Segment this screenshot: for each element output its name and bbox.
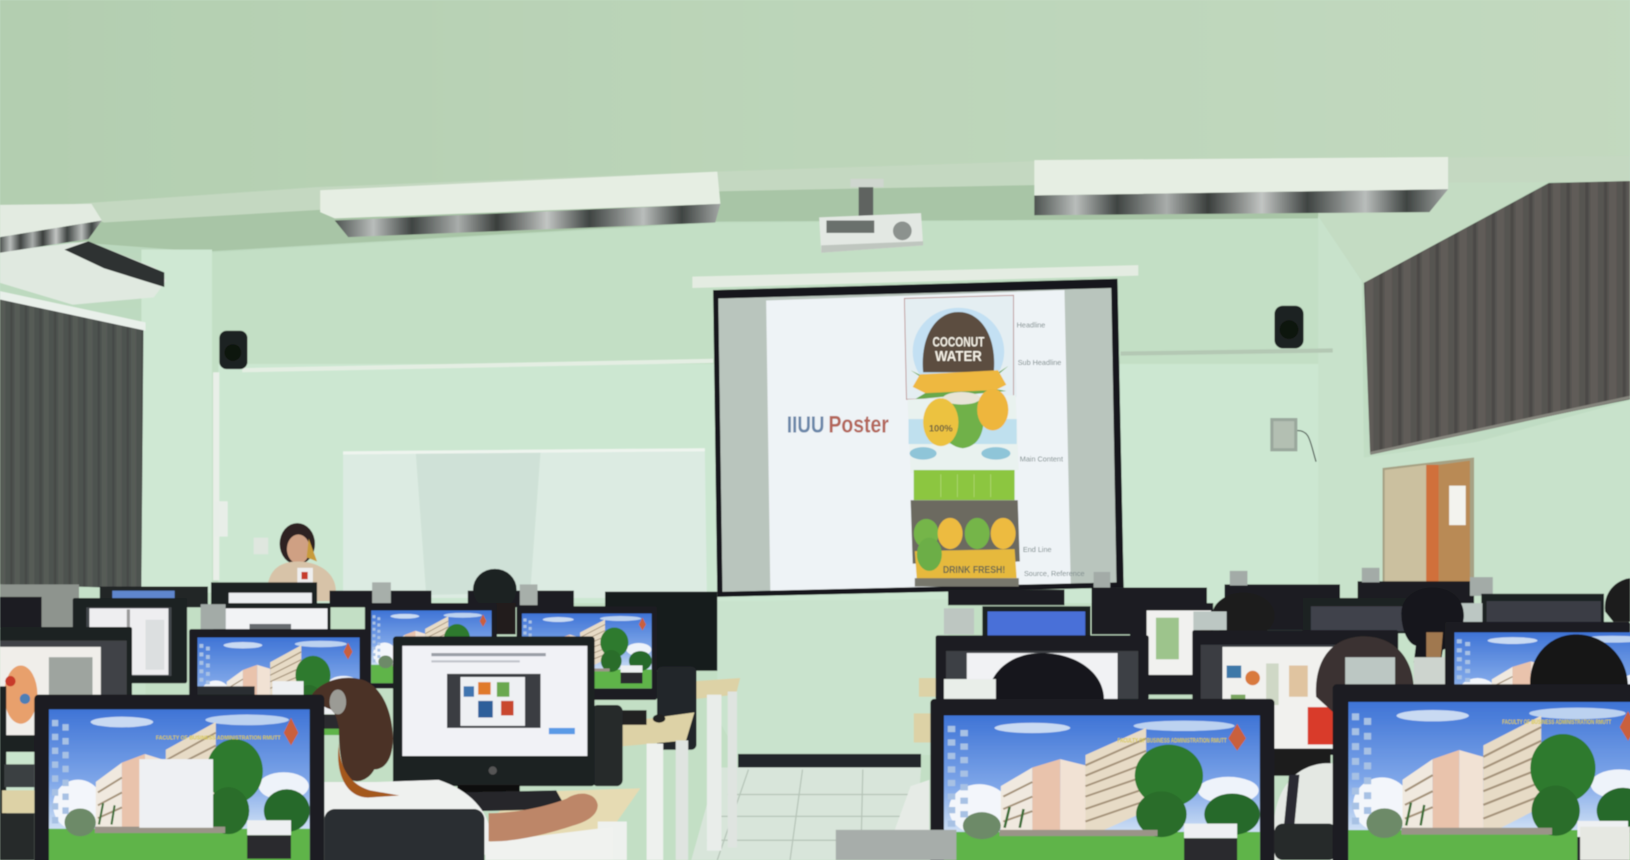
poster ribbon <box>913 370 1006 393</box>
left desk <box>2 790 34 813</box>
student with long hair <box>1273 636 1414 860</box>
slide title <box>787 412 889 439</box>
poster labels: Sub Headline <box>1018 358 1061 367</box>
wall picture rail left <box>242 359 713 372</box>
speaker: left <box>219 331 247 369</box>
monitor: front centre wallpaper <box>930 699 1274 860</box>
arm <box>489 794 598 841</box>
student head <box>988 653 1104 700</box>
light fixture: right <box>1034 157 1448 215</box>
wall box and cable <box>1270 418 1316 462</box>
monitor: row 3 wallpaper <box>189 629 368 735</box>
wall socket <box>214 501 228 537</box>
slide <box>766 290 1085 591</box>
hair clip <box>330 689 346 714</box>
monitor: dark screen <box>1303 598 1406 633</box>
whiteboard <box>343 448 707 598</box>
floor <box>691 767 921 860</box>
wallpaper caption: FACULTY OF BUSINESS ADMINISTRATION RMUTT <box>1118 737 1227 744</box>
wall pillar right <box>1318 216 1630 624</box>
poster labels: Headline <box>1017 321 1045 330</box>
poster labels: Source, Reference <box>1024 569 1085 578</box>
desk leg <box>598 822 627 860</box>
projector <box>819 179 923 253</box>
poster footer <box>915 578 1019 587</box>
student with ponytail <box>312 678 598 855</box>
ceiling plane <box>0 0 1630 205</box>
monitor: row 2 left poster <box>73 598 187 683</box>
monitor: row 2 web page <box>201 603 331 634</box>
wall pillar left <box>141 250 212 593</box>
far right student <box>1605 578 1630 622</box>
monitor: book spread row 2 <box>1130 603 1227 695</box>
poster benefit circles <box>914 518 1016 549</box>
poster leaves <box>911 366 1008 399</box>
slide title: Poster <box>829 412 889 439</box>
desk rows: centre aisle <box>619 678 740 860</box>
keyboard and mouse <box>615 710 665 725</box>
monitor: dark screen far right <box>1452 594 1604 633</box>
screen frame <box>713 279 1124 597</box>
speaker: right <box>1274 306 1304 348</box>
poster labels <box>1017 321 1085 578</box>
head behind monitor <box>1212 593 1274 639</box>
poster end line <box>915 549 1017 580</box>
presenter <box>267 523 336 601</box>
skirting board <box>738 754 921 767</box>
wall picture rail right <box>1121 348 1333 356</box>
head behind monitors <box>473 569 517 634</box>
poster badge right <box>977 389 1008 431</box>
window glare left <box>0 291 146 331</box>
wallpaper caption: FACULTY OF BUSINESS ADMINISTRATION RMUTT <box>156 735 281 741</box>
shirt <box>324 780 491 855</box>
poster: coconut water: DRINK FRESH! <box>943 565 1005 576</box>
poster: coconut water: 100% <box>929 424 953 434</box>
right side ceiling <box>1318 156 1630 283</box>
monitor: row 3 wallpaper far right <box>1445 622 1630 736</box>
light fixture: centre <box>320 172 720 237</box>
poster badge left <box>923 398 958 446</box>
poster beach panel <box>908 395 1019 473</box>
curtain: left window <box>0 297 143 589</box>
door right <box>1383 458 1474 582</box>
monitor: row 2 wallpaper centre <box>365 603 497 688</box>
poster: coconut water <box>904 295 1020 587</box>
poster coconut cup <box>938 395 984 448</box>
upper back wall <box>146 218 1362 860</box>
screen housing <box>692 265 1138 288</box>
poster coconut <box>923 312 994 372</box>
poster palms <box>910 447 1010 460</box>
wall below the screen <box>717 599 948 755</box>
keyboard <box>463 790 567 811</box>
poster outline boxes <box>904 295 1014 399</box>
curtain: right window <box>1364 181 1630 453</box>
screen surface <box>718 288 1116 592</box>
curtain trim right <box>1370 397 1630 453</box>
monitor: row 2 wallpaper right <box>517 606 696 750</box>
back row monitors: left side <box>0 582 574 628</box>
poster headline: COCONUT <box>932 334 985 349</box>
monitor: front right wallpaper <box>1333 684 1630 860</box>
light fixture: left <box>0 204 102 253</box>
poster grey band <box>911 500 1020 564</box>
monitor: blue screen <box>944 606 1090 637</box>
student left of front monitor <box>890 780 929 860</box>
chair back <box>324 809 484 860</box>
poster: coconut water: WATER <box>935 349 982 365</box>
left edge monitor <box>0 686 6 853</box>
monitor: centre with web page <box>393 636 595 793</box>
front desk left <box>489 788 640 844</box>
student head <box>1530 634 1628 686</box>
monitor: blank back <box>605 592 717 671</box>
monitor: front left wallpaper <box>34 695 324 860</box>
air conditioner <box>0 241 166 305</box>
dialog over wallpaper <box>139 759 213 828</box>
monitor: row 3 poster left <box>0 627 132 752</box>
conduit <box>213 372 219 580</box>
side desk <box>914 678 936 742</box>
slide title: IIUU <box>787 412 824 438</box>
monitor: row 3 document with student <box>936 635 1149 702</box>
paper tag in foreground <box>836 830 956 860</box>
hair <box>312 678 393 781</box>
poster table <box>914 470 1015 500</box>
poster labels: Main Content <box>1020 455 1063 464</box>
lower wall band <box>218 364 1320 603</box>
ceiling beam edge <box>62 156 1630 223</box>
poster labels: End Line <box>1023 545 1052 554</box>
back row monitors: right side <box>948 568 1493 634</box>
monitor: row 3 infographic book <box>1192 630 1398 776</box>
student in mask <box>1401 588 1464 694</box>
projection screen <box>692 265 1138 597</box>
wall switch <box>254 538 268 554</box>
recessed ceiling <box>62 166 1357 252</box>
computer chair backs <box>591 705 623 786</box>
paper on monitor <box>944 679 996 702</box>
